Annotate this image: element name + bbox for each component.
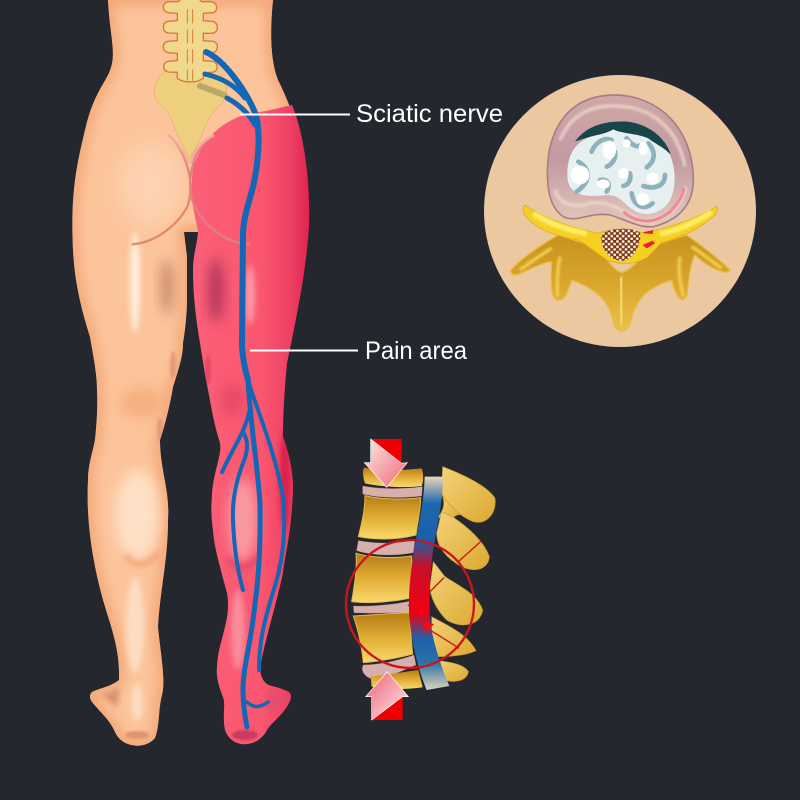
spinal cord, blue to red — [409, 477, 449, 690]
disc 2 — [357, 540, 415, 555]
red pain area on right leg — [192, 105, 309, 744]
body figure: back view with sciatic nerve — [72, 0, 309, 746]
panel: spine cross section, top-down view of herniated disc — [484, 75, 756, 347]
nucleus squiggles — [577, 138, 665, 207]
pain area shading — [205, 258, 290, 740]
arch highlights — [621, 277, 622, 325]
vertebra 2 — [358, 496, 421, 539]
nucleus white blobs — [571, 139, 659, 206]
leader line — [240, 114, 350, 116]
sciatic nerve branches — [205, 52, 284, 727]
lesion circle and pointers — [346, 540, 481, 668]
compressed nerve red marks — [643, 230, 655, 248]
annulus light band — [555, 106, 686, 222]
band highlight — [533, 212, 712, 234]
annulus of disc — [547, 95, 693, 227]
spine and sacrum, drawn in zoomed coordinates — [132, 0, 250, 244]
spinous processes — [430, 467, 495, 681]
sacrum — [154, 68, 226, 159]
yellow lamina band — [523, 205, 718, 263]
buttock creases — [132, 135, 190, 244]
vertebra 4 — [353, 613, 413, 663]
crease top tint — [168, 135, 214, 163]
label: pain area: Pain area — [365, 337, 467, 365]
vertebra top fragment — [363, 467, 423, 487]
vertebra 3 — [352, 553, 412, 603]
label: sciatic nerve: Sciatic nerve — [356, 100, 503, 128]
nucleus — [567, 129, 675, 214]
lumbar vertebrae — [163, 0, 217, 82]
dark gap above nucleus — [575, 122, 671, 154]
disc 3, herniated — [353, 601, 419, 613]
bottom pressure arrow — [366, 672, 408, 720]
top pressure arrow — [364, 439, 407, 487]
leader line — [250, 350, 358, 352]
disc 4 — [362, 655, 416, 679]
panel: side view of compressed spine — [346, 439, 495, 720]
spinal canal with nerve roots — [601, 229, 640, 261]
vertebra bottom fragment — [371, 670, 423, 689]
sacral olive mark — [200, 86, 224, 95]
skin silhouette — [72, 0, 290, 746]
golden vertebral arch with processes — [510, 235, 730, 331]
disc 1 — [363, 486, 422, 498]
skin shading and highlights — [72, 0, 290, 746]
